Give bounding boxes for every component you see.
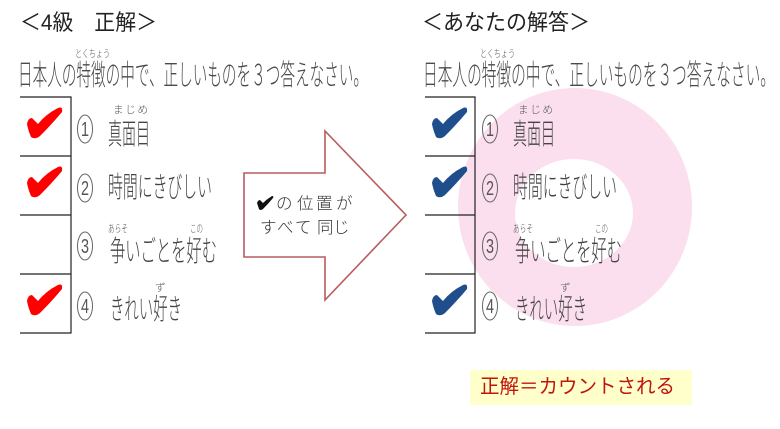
- option 3: [482, 223, 622, 268]
- option 4: [78, 282, 182, 326]
- arrow note text line 2: すべて同じ: [260, 219, 350, 237]
- callout: correct answer is counted: [470, 370, 692, 405]
- option 3: 3: [81, 236, 89, 258]
- question text: 日本人の特徴の中で、正しいものを３つ答えなさい。: [18, 59, 368, 92]
- panel: your answer question: [423, 48, 775, 333]
- answer table lines: [425, 97, 475, 333]
- icon: blue check 1: [432, 108, 467, 138]
- option 2: 2: [81, 178, 89, 200]
- option 4: ず: [155, 282, 166, 294]
- icon: small black check in note: [257, 196, 273, 210]
- heading: your answer: ＜あなたの解答＞: [422, 10, 590, 35]
- option 1: まじめ: [113, 104, 148, 116]
- question ruby: とくちょう: [480, 48, 515, 60]
- icon: red check 1: [27, 108, 62, 138]
- option 4: 4: [81, 296, 89, 318]
- option 2: [78, 172, 212, 204]
- option 3: 争いごとを好む: [110, 235, 217, 268]
- option 2: 時間にきびしい: [108, 172, 212, 204]
- heading: correct answer: ＜4級 正解＞: [20, 10, 157, 35]
- option 1: [482, 104, 555, 151]
- arrow with note: [244, 131, 406, 300]
- option 1: [78, 104, 150, 151]
- option 2: 時間にきびしい: [513, 172, 617, 204]
- option 1: 1: [486, 119, 494, 141]
- option 1: まじめ: [518, 104, 553, 116]
- icon: red check 4: [27, 284, 62, 315]
- panel: correct answer question: [18, 48, 368, 333]
- option 3: この: [190, 223, 203, 235]
- option 2: 2: [486, 178, 494, 200]
- option 1: 1: [81, 119, 89, 141]
- option 3: あらそ: [108, 223, 128, 235]
- icon: pink donut circle: [458, 88, 692, 326]
- panel: your answer question: 真面目: [513, 118, 555, 151]
- panel: correct answer question: 真面目: [108, 118, 150, 151]
- option 4: ず: [560, 282, 570, 294]
- arrow outline: [244, 131, 406, 300]
- callout: correct answer is counted: 正解＝カウントされる: [480, 375, 675, 398]
- icon: blue check 2: [432, 166, 467, 197]
- option 4: 4: [486, 296, 494, 318]
- panel: correct answer question: きれい好き: [110, 294, 182, 326]
- question ruby: とくちょう: [75, 48, 110, 60]
- icon: red check 2: [27, 166, 62, 197]
- option 2: [482, 172, 617, 204]
- option 3: 3: [486, 236, 494, 258]
- option 4: [482, 282, 587, 326]
- answer table lines: [20, 97, 71, 333]
- arrow note text: の位置が: [276, 194, 353, 213]
- option 3: 争いごとを好む: [515, 235, 622, 268]
- icon: blue check 4: [432, 284, 467, 315]
- option 3: [78, 223, 217, 268]
- option 3: あらそ: [513, 223, 533, 235]
- panel: your answer question: きれい好き: [515, 294, 587, 326]
- option 3: この: [595, 223, 608, 235]
